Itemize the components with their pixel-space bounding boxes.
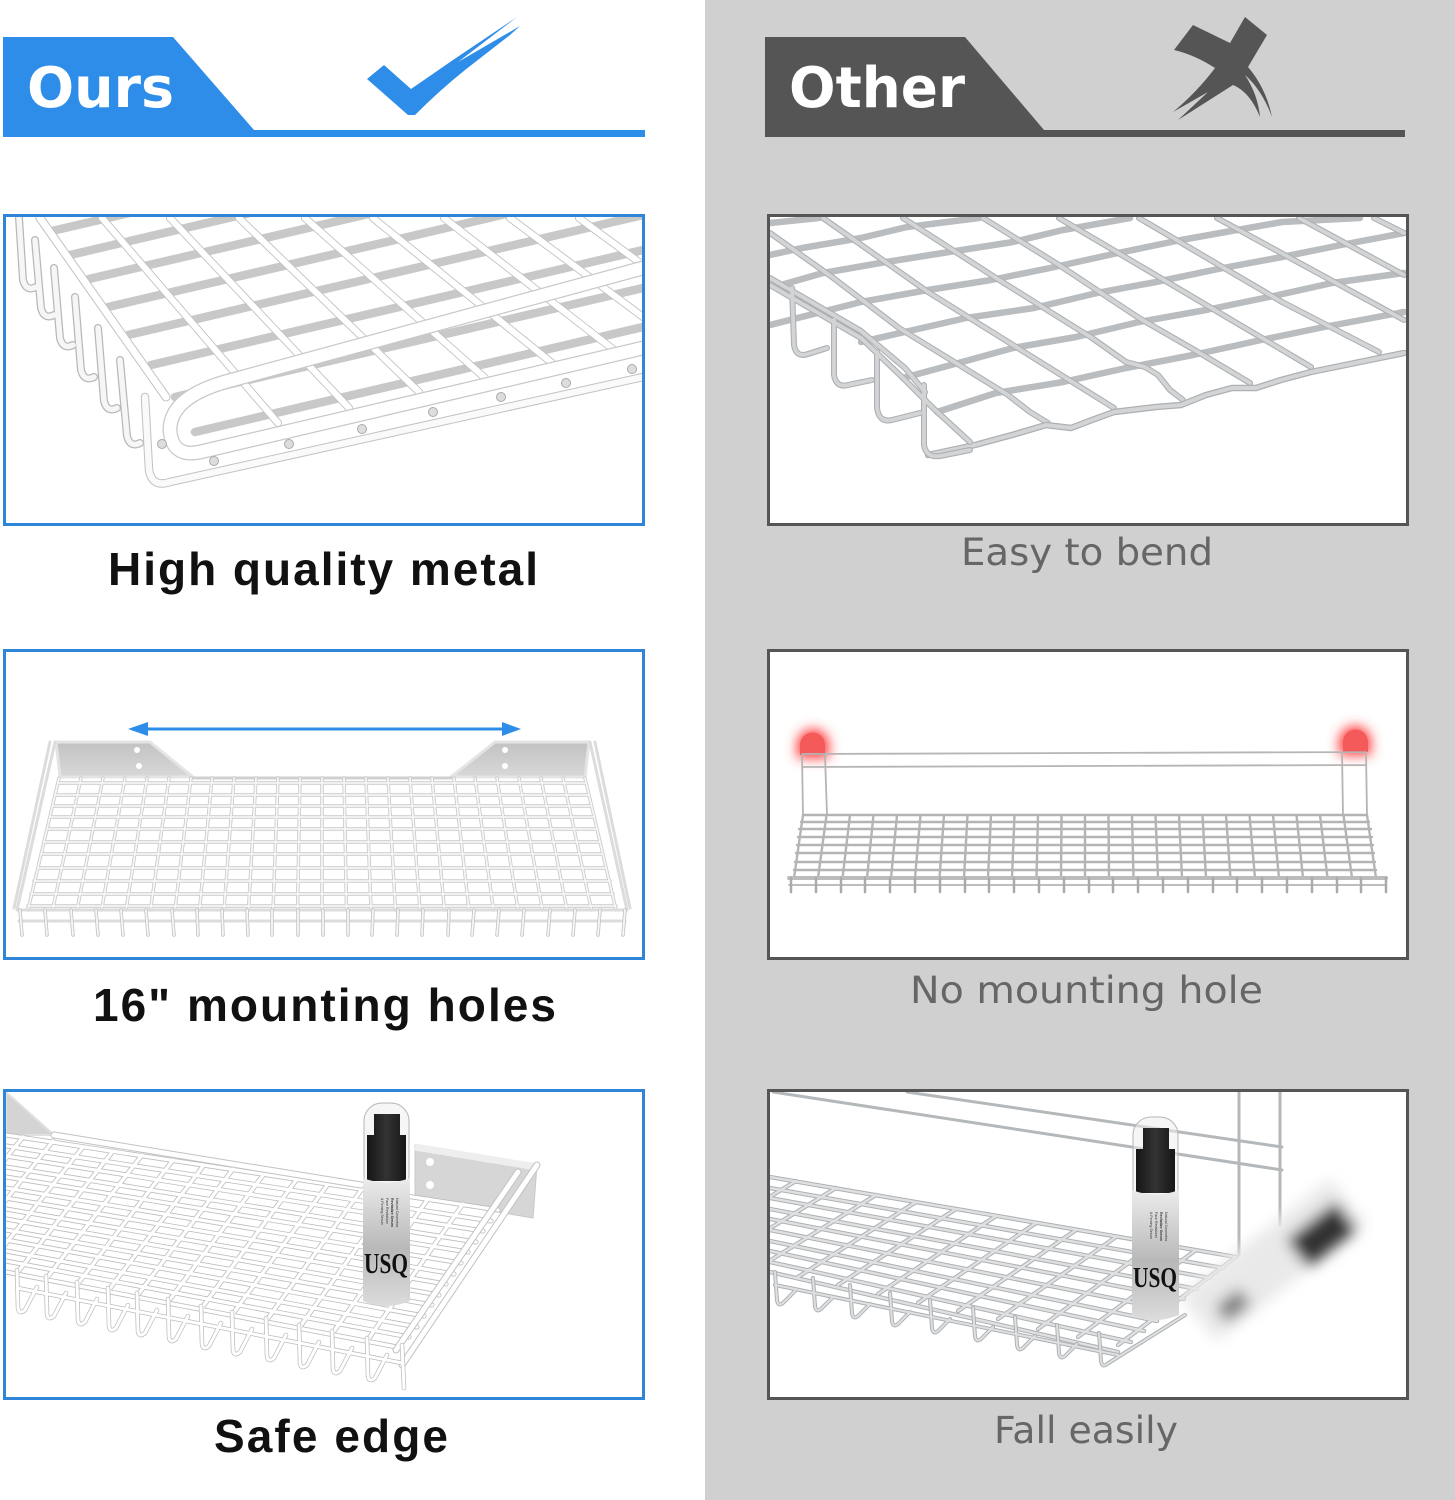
caption: Easy to bend: Easy to bend — [961, 531, 1213, 574]
double arrow: hole spacing — [128, 722, 521, 736]
mounting bracket right — [451, 742, 589, 777]
cosmetic bottle — [363, 1103, 410, 1306]
panel: high quality metal close-up — [3, 214, 645, 526]
red marker left — [797, 729, 829, 758]
cosmetic bottle: Face Revitalizer — [385, 1198, 389, 1225]
cosmetic bottle: Revitalize Serum — [390, 1198, 394, 1227]
falling bottle motion blur — [1180, 1179, 1366, 1341]
cosmetic bottle: USQ — [1133, 1262, 1177, 1294]
wire mesh shelf — [14, 742, 630, 935]
header: Other: Other — [789, 56, 965, 121]
header: Ours — [3, 37, 645, 137]
panel: easy to bend wire — [768, 216, 1408, 524]
panel: safe edge shelf with bottle — [0, 1090, 644, 1398]
cosmetic bottle: Natural Cosmetics — [1164, 1212, 1168, 1242]
icon: dark cross mark — [1173, 17, 1272, 120]
caption: No mounting hole: No mounting hole — [910, 969, 1263, 1012]
panel: 16 inch mounting holes — [4, 650, 644, 958]
cosmetic bottle — [1132, 1117, 1179, 1320]
brackets — [6, 1092, 537, 1218]
caption: Fall easily: Fall easily — [994, 1409, 1178, 1452]
cosmetic bottle: Natural Cosmetics — [395, 1198, 399, 1228]
weld pins — [158, 364, 636, 466]
header: Ours: Ours — [27, 56, 174, 121]
caption: Safe edge: Safe edge — [214, 1410, 448, 1462]
right column gray background — [705, 0, 1455, 1500]
caption: High quality metal: High quality metal — [108, 543, 538, 595]
cosmetic bottle: & Firming Serum — [1149, 1212, 1153, 1239]
cosmetic bottle: Revitalize Serum — [1159, 1212, 1163, 1241]
mounting bracket left — [56, 742, 193, 777]
cosmetic bottle: Face Revitalizer — [1154, 1212, 1158, 1239]
wire mesh shelf — [789, 815, 1386, 892]
upright wires — [773, 1092, 1282, 1255]
panel: no mounting hole — [768, 650, 1408, 958]
panel: fall easily with tipping bottle — [767, 1089, 1409, 1400]
upright posts and rails — [802, 752, 1367, 815]
icon: blue check mark — [367, 17, 520, 115]
header: Other — [765, 37, 1405, 137]
cosmetic bottle: USQ — [364, 1248, 408, 1280]
cosmetic bottle: & Firming Serum — [380, 1198, 384, 1225]
caption: 16 inch mounting holes: 16" mounting holes — [93, 979, 556, 1031]
red marker right — [1339, 726, 1371, 755]
